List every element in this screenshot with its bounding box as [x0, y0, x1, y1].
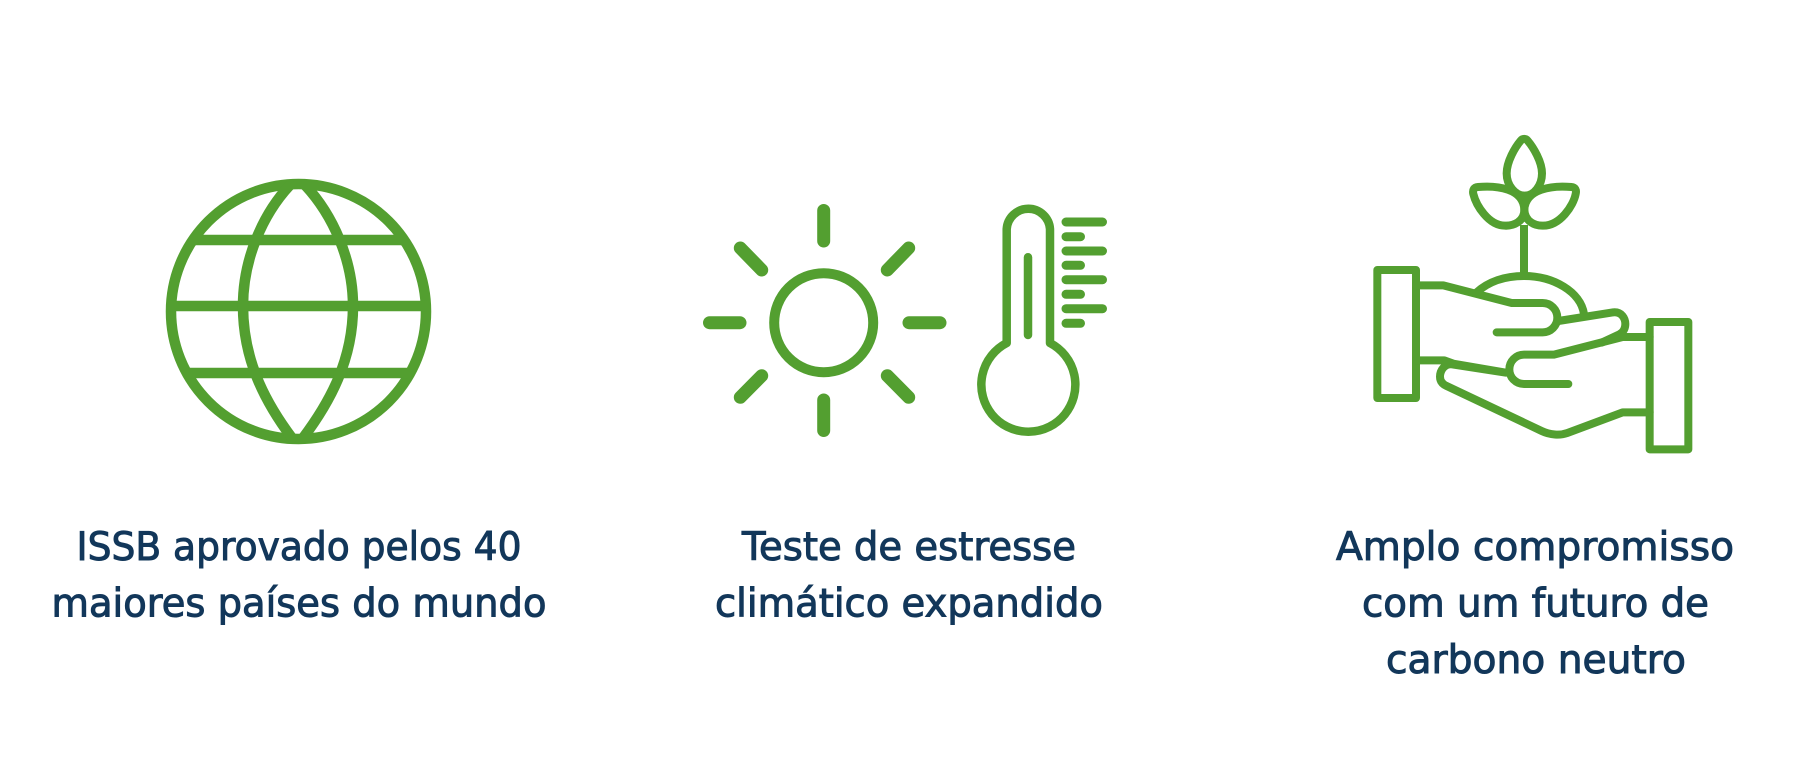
- text: carbon commitment caption: carbono neutro: [1386, 638, 1686, 683]
- icon: sun: [710, 210, 940, 430]
- icon: globe: [170, 184, 427, 439]
- left cuff: [1377, 270, 1416, 398]
- upper hand finger: [1558, 312, 1625, 343]
- text: stress test caption: [715, 525, 1103, 626]
- text: ISSB caption: ISSB aprovado pelos 40: [76, 525, 522, 570]
- lower hand finger: [1416, 360, 1650, 435]
- right cuff: [1650, 322, 1688, 449]
- text: stress test caption: climático expandido: [715, 582, 1103, 626]
- stem: [1512, 225, 1536, 276]
- left leaf: [1473, 187, 1524, 226]
- soil mound: [1477, 276, 1584, 314]
- icon: thermometer: [981, 209, 1102, 432]
- upper hand: [1416, 285, 1557, 332]
- top leaf: [1507, 139, 1542, 196]
- text: ISSB caption: maiores países do mundo: [52, 582, 546, 626]
- lower hand: [1509, 337, 1650, 384]
- text: stress test caption: Teste de estresse: [741, 525, 1076, 570]
- text: ISSB caption: [52, 525, 546, 626]
- text: carbon commitment caption: com um futuro de: [1362, 582, 1709, 626]
- right leaf: [1524, 187, 1576, 226]
- text: carbon commitment caption: Amplo compromisso: [1336, 525, 1734, 570]
- icon: hands holding a seedling: [1377, 139, 1688, 449]
- text: carbon commitment caption: [1336, 525, 1734, 683]
